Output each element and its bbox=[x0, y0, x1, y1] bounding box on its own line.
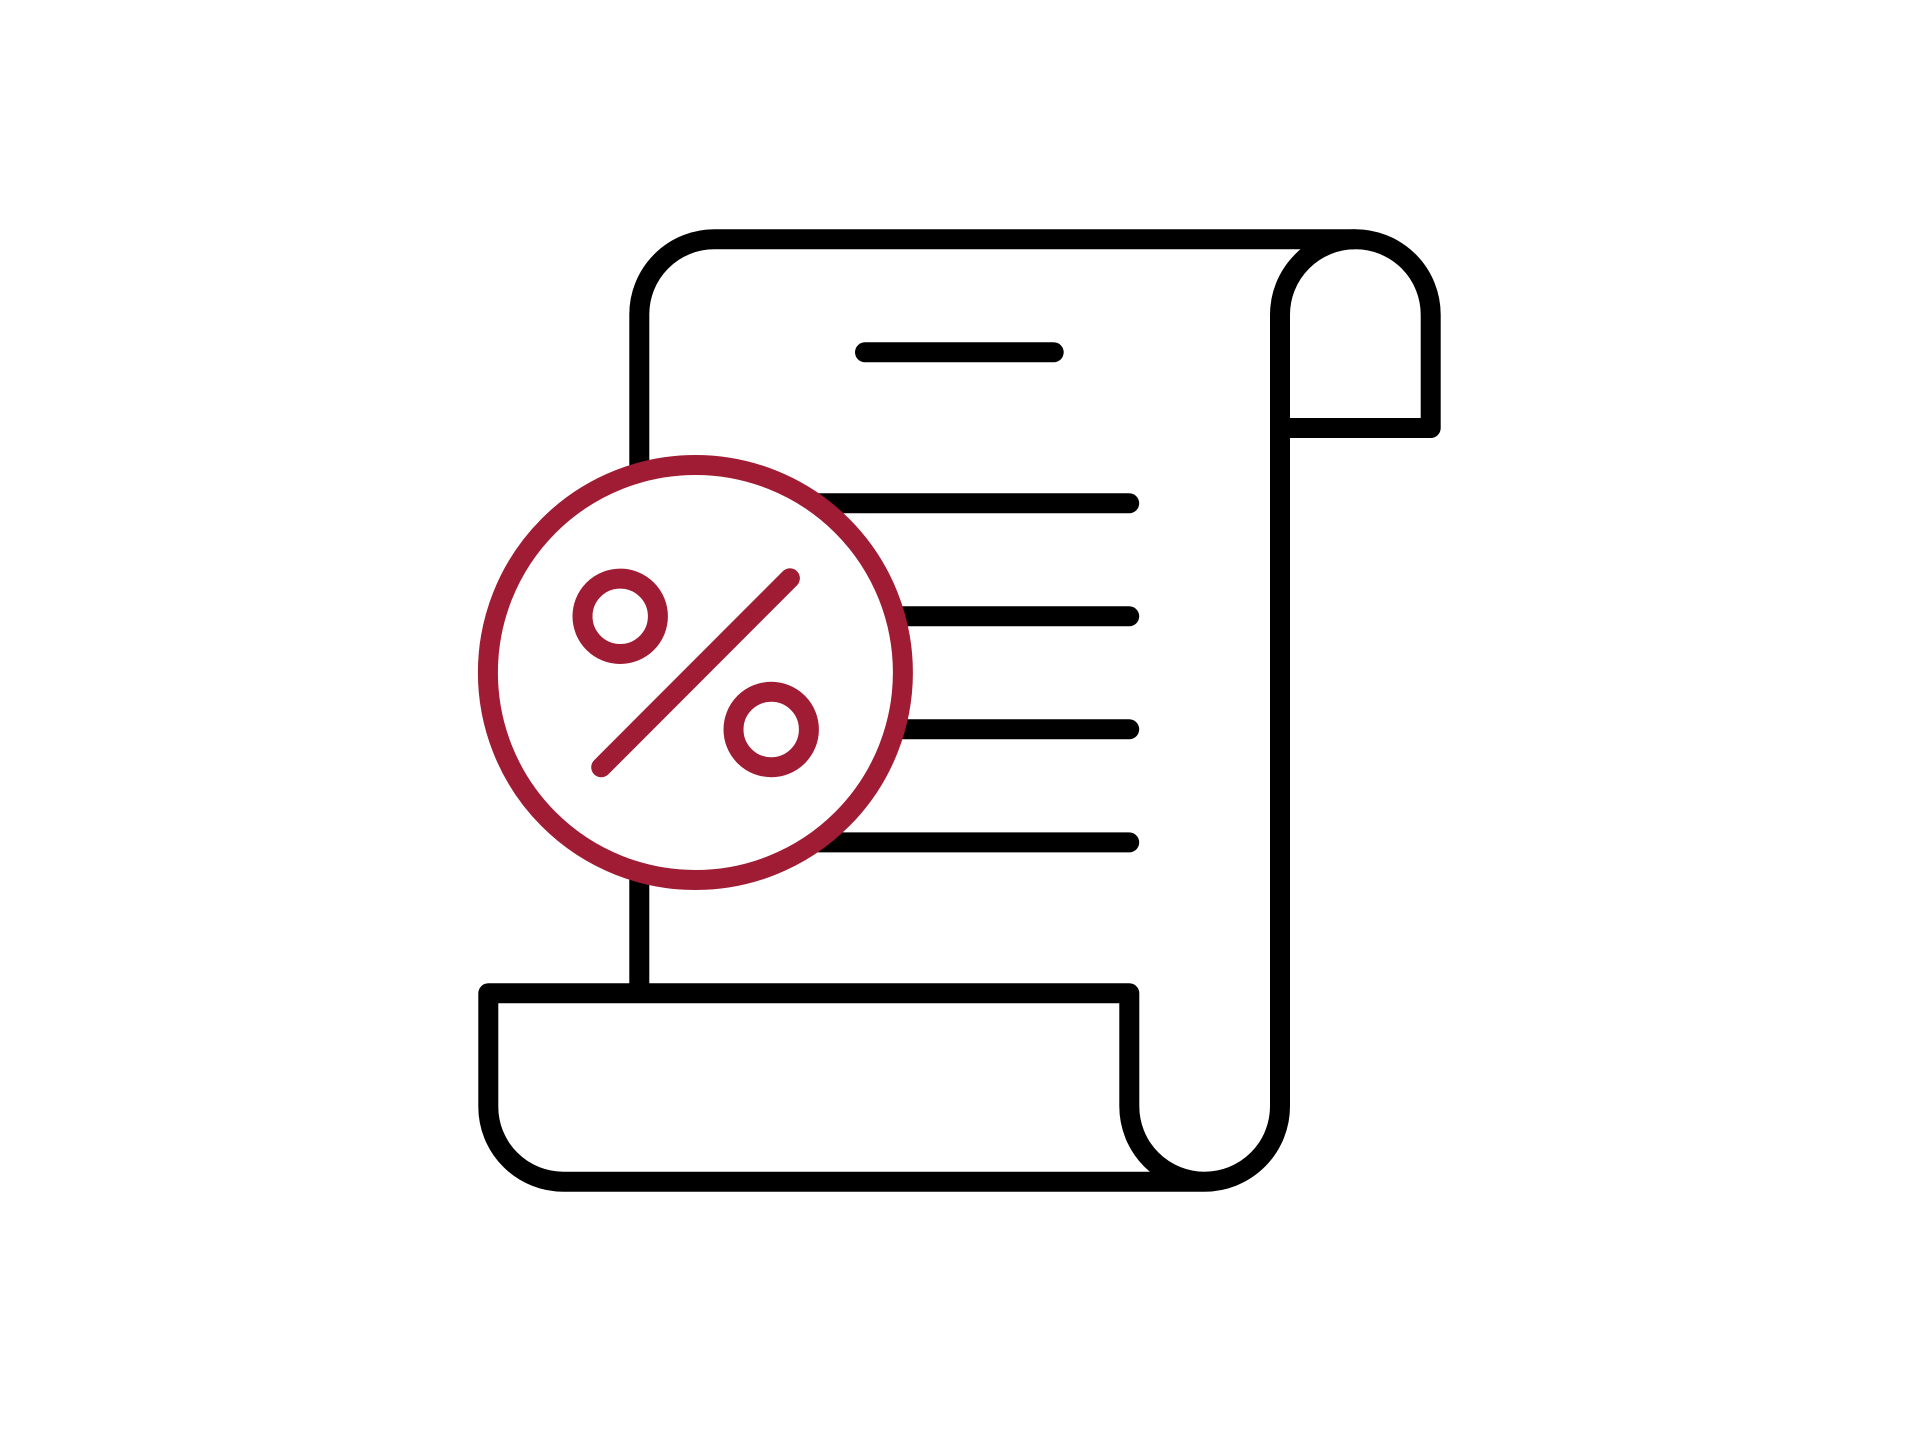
percent bottom circle bbox=[734, 692, 809, 767]
badge circle bbox=[488, 465, 903, 880]
icon: paper scroll document bbox=[488, 239, 1431, 1182]
document text line 4 bbox=[780, 832, 1129, 852]
scroll main right edge and bottom roll bbox=[488, 239, 1355, 1182]
percent slash bbox=[601, 578, 790, 767]
document text line 1 bbox=[780, 493, 1129, 513]
scroll top sheet and right curl bbox=[639, 239, 1431, 700]
document text line 2 bbox=[780, 606, 1129, 626]
percent top circle bbox=[582, 579, 658, 654]
scroll left edge lower segment bbox=[629, 700, 649, 993]
document heading line bbox=[865, 342, 1054, 362]
document text line 3 bbox=[780, 719, 1129, 739]
icon: percent badge bbox=[488, 465, 903, 880]
